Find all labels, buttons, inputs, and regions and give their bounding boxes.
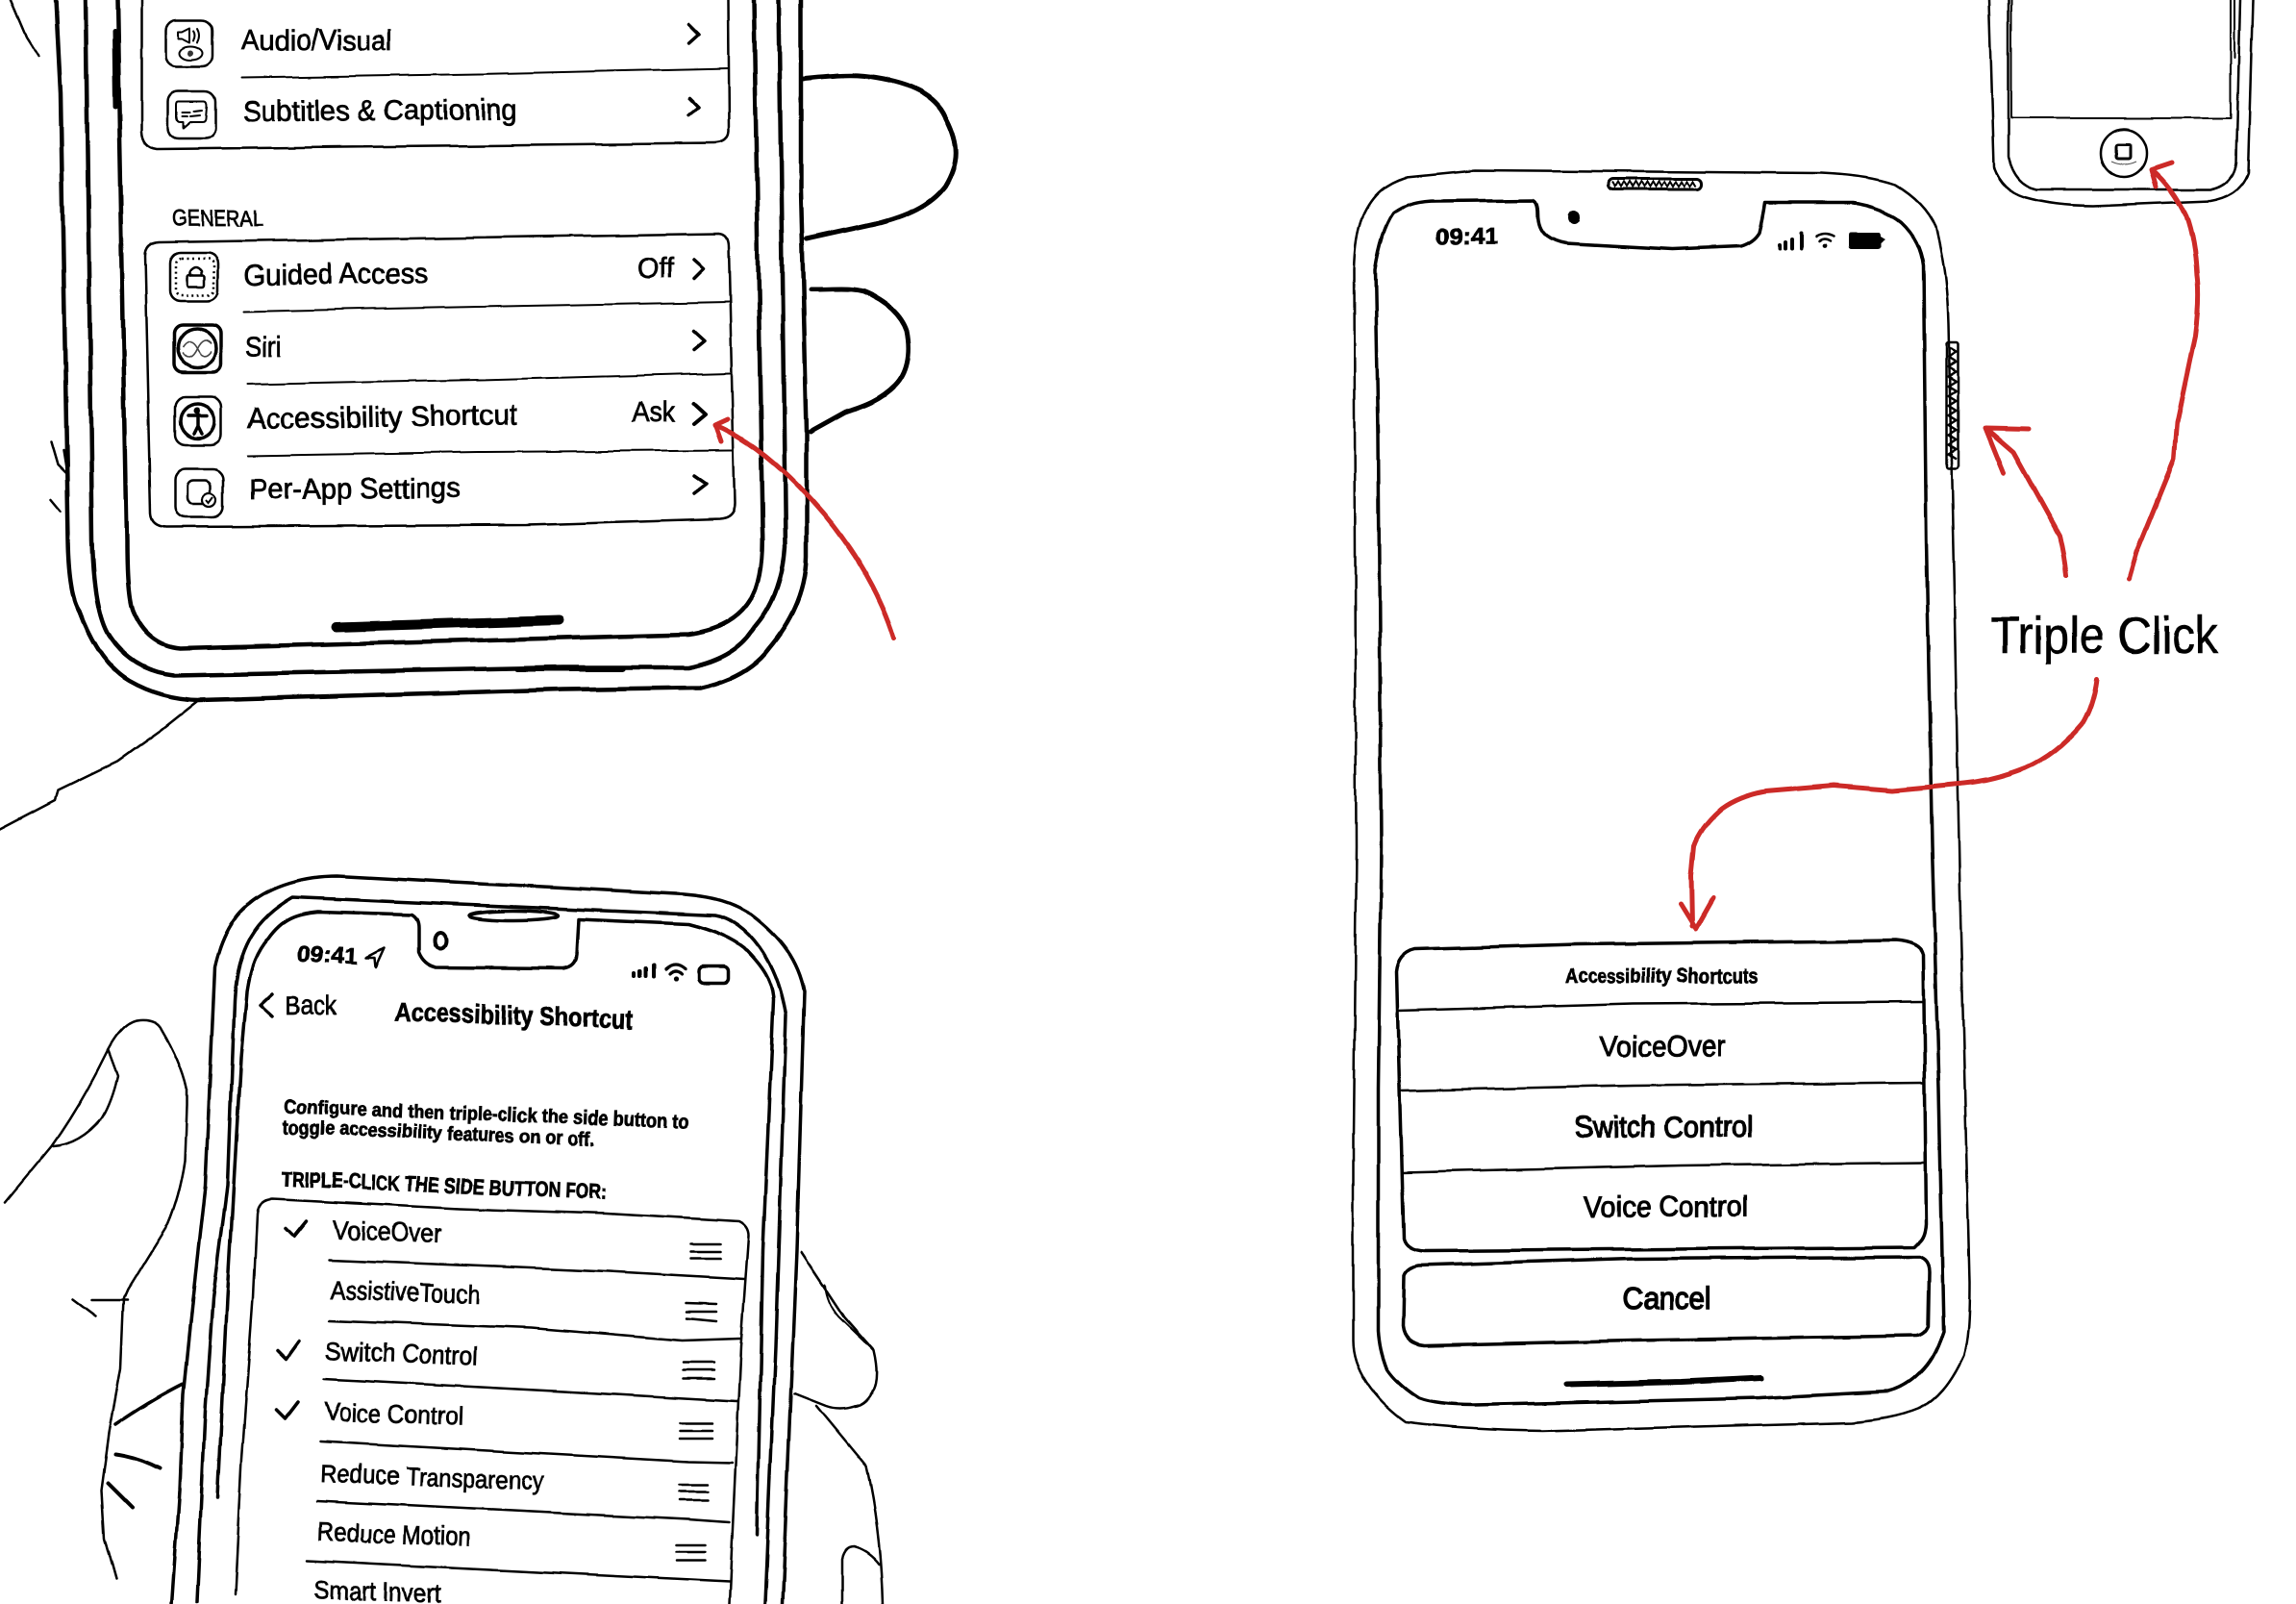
arrow: red to action sheet	[1681, 679, 2097, 929]
row: Switch Control: Switch Control	[325, 1337, 479, 1371]
row: Reduce Transparency	[320, 1459, 708, 1500]
label: Accessibility Shortcut: Accessibility Shortcut	[247, 399, 518, 436]
phone: small phone with home button	[1989, 0, 2253, 206]
row: Reduce Motion: Reduce Motion	[316, 1517, 471, 1552]
arrow: red to accessibility shortcut	[715, 419, 894, 639]
time: 09:41	[296, 940, 359, 969]
chevron	[689, 98, 699, 115]
icon: subtitles	[168, 91, 215, 138]
row: VoiceOver	[287, 1216, 719, 1258]
icon: per-app settings	[175, 469, 223, 517]
phone body outlines	[56, 0, 807, 700]
chevron: back	[260, 993, 273, 1016]
arrow: red to home button	[2129, 163, 2198, 579]
icon: battery	[1848, 233, 1886, 249]
option: Voice Control: Voice Control	[1585, 1190, 1748, 1223]
label: Per-App Settings: Per-App Settings	[249, 472, 461, 506]
button: cancel: Cancel	[1623, 1281, 1711, 1316]
row: VoiceOver: VoiceOver	[333, 1216, 441, 1248]
label: Subtitles & Captioning: Subtitles & Captioning	[242, 94, 517, 128]
chevron	[694, 332, 705, 350]
icon: home button	[2101, 129, 2147, 177]
phone body outlines	[171, 876, 804, 1604]
screen	[2011, 0, 2234, 118]
camera	[1567, 211, 1579, 224]
notch speaker	[469, 911, 558, 920]
button: cancel	[1404, 1257, 1929, 1345]
row: AssistiveTouch	[329, 1275, 717, 1321]
chevron	[694, 404, 706, 424]
chevron	[694, 476, 707, 494]
phone: accessibility shortcut list with hand	[6, 876, 883, 1604]
speaker	[1608, 179, 1702, 189]
row: Reduce Motion	[316, 1517, 706, 1561]
panel: action sheet	[1396, 940, 1927, 1251]
arrow: red to side button	[1985, 428, 2066, 576]
icon: battery	[698, 966, 729, 983]
notch camera	[435, 933, 446, 948]
chevron	[689, 25, 699, 43]
wifi dot	[673, 975, 678, 981]
row: Voice Control	[277, 1397, 711, 1439]
panel: feature list	[235, 1199, 748, 1604]
back label: Back	[287, 990, 337, 1020]
panel: audio and subtitles	[141, 0, 729, 149]
icon: audio visual	[166, 20, 212, 66]
value: off: Off	[637, 253, 675, 285]
status bar	[1436, 224, 1886, 250]
icon: signal	[635, 965, 654, 976]
value: ask: Ask	[633, 396, 676, 428]
icon: guided access	[170, 253, 218, 301]
label: Guided Access: Guided Access	[244, 258, 428, 291]
row: Reduce Transparency: Reduce Transparency	[320, 1459, 545, 1495]
description text	[282, 1096, 689, 1150]
section heading: TRIPLE-CLICK THE SIDE BUTTON FOR:	[281, 1166, 608, 1204]
icon: location	[365, 948, 385, 967]
navigation bar	[260, 990, 633, 1035]
home indicator	[337, 620, 560, 627]
row: AssistiveTouch: AssistiveTouch	[329, 1275, 481, 1309]
hand: thumb and fingers	[6, 1020, 883, 1604]
chevron	[694, 260, 704, 278]
home indicator	[1567, 1378, 1761, 1385]
icon: siri	[174, 325, 221, 372]
panel: general settings	[145, 234, 735, 527]
description text: Configure and then triple-click the side button to	[284, 1096, 689, 1133]
side button	[1946, 343, 1958, 468]
option: Switch Control: Switch Control	[1575, 1110, 1754, 1143]
option: VoiceOver: VoiceOver	[1600, 1029, 1727, 1063]
wifi dot	[1823, 243, 1828, 247]
label: Triple Click: Triple Click	[1991, 607, 2219, 664]
phone: settings list with hand	[0, 0, 956, 830]
phone body outlines	[1354, 170, 1969, 1431]
phone: large phone with action sheet	[1354, 170, 1969, 1431]
icon: accessibility	[174, 397, 221, 445]
icon: signal	[1779, 233, 1802, 247]
label: Audio/Visual: Audio/Visual	[241, 25, 392, 57]
time: 09:41	[1436, 224, 1498, 250]
status bar	[296, 940, 729, 983]
row: Voice Control: Voice Control	[323, 1397, 463, 1431]
icon: wifi	[1817, 233, 1834, 240]
heading: general: GENERAL	[172, 206, 263, 232]
title: Accessibility Shortcuts: Accessibility Shortcuts	[1565, 965, 1758, 988]
row: Switch Control	[277, 1337, 713, 1379]
screen title: Accessibility Shortcut	[394, 996, 633, 1035]
description text: toggle accessibility features on or off.	[282, 1116, 595, 1150]
icon: wifi	[665, 964, 685, 973]
hand: fingers and palm	[0, 0, 956, 830]
label: Siri: Siri	[246, 332, 282, 363]
